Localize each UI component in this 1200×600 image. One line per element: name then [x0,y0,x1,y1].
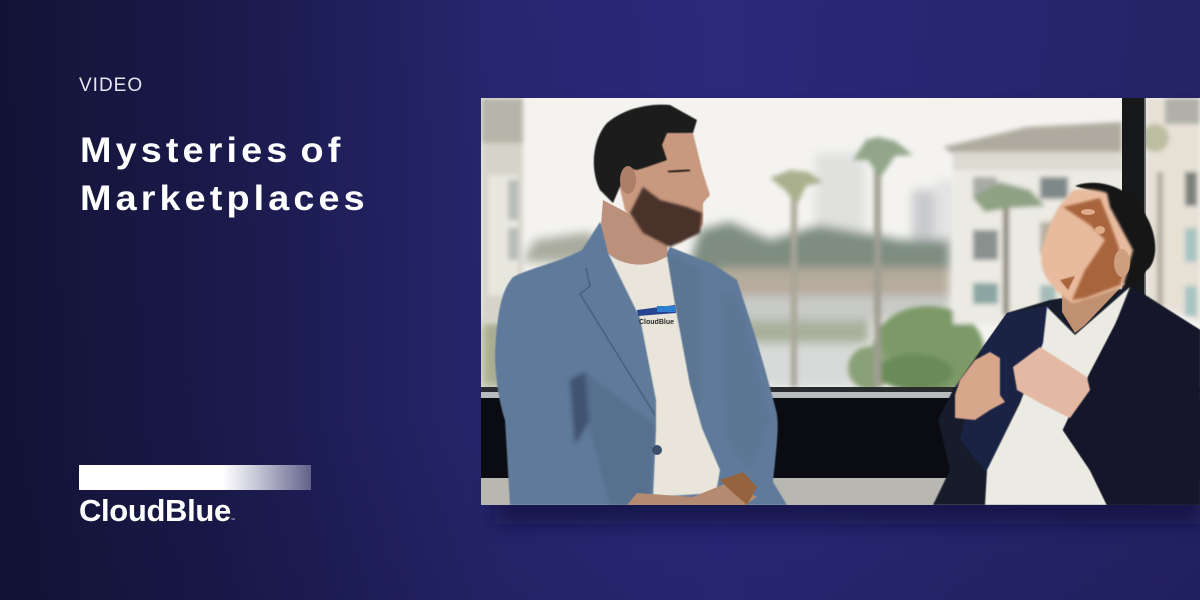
hair [594,105,697,203]
ear [620,166,636,194]
title [80,131,369,218]
window background scenery [481,98,1200,394]
main building [943,122,1122,155]
button [652,445,662,455]
beard [630,187,702,247]
right hand [1013,347,1090,418]
left building [481,98,523,323]
t-shirt [608,253,720,497]
distant trees and ground [522,232,610,262]
face [618,130,710,243]
logo wordmark: CloudBlue™ [79,493,235,528]
white shirt [985,287,1130,505]
skin patches [1063,198,1125,300]
ear [1114,249,1130,277]
title: Mysteries of [80,131,344,170]
eyebrow label: VIDEO [79,75,143,96]
neck [601,200,668,265]
bushes [872,306,984,394]
hands and watch [627,483,757,505]
window frame and sill [481,98,1200,505]
eye and brow [668,170,690,172]
shirt logo stripe [637,305,676,316]
palm trees [874,165,881,387]
video still: two men talking by a window [481,98,1200,505]
right building [1146,98,1200,322]
left hand [955,352,1005,420]
hair [1075,183,1155,287]
shirt logo text: CloudBlue [639,319,674,326]
logo gradient bar [79,465,311,490]
title: Marketplaces [80,179,369,218]
blazer shading [570,252,770,505]
neck [1062,283,1125,333]
right blazer sleeve [1063,290,1200,505]
blazer [495,222,787,505]
man on the left in blue blazer [495,105,787,505]
logo: CloudBlue [79,465,311,528]
distant buildings [815,153,865,243]
face [1041,189,1133,303]
man on the right in dark blazer [933,183,1200,505]
blazer [933,287,1200,505]
